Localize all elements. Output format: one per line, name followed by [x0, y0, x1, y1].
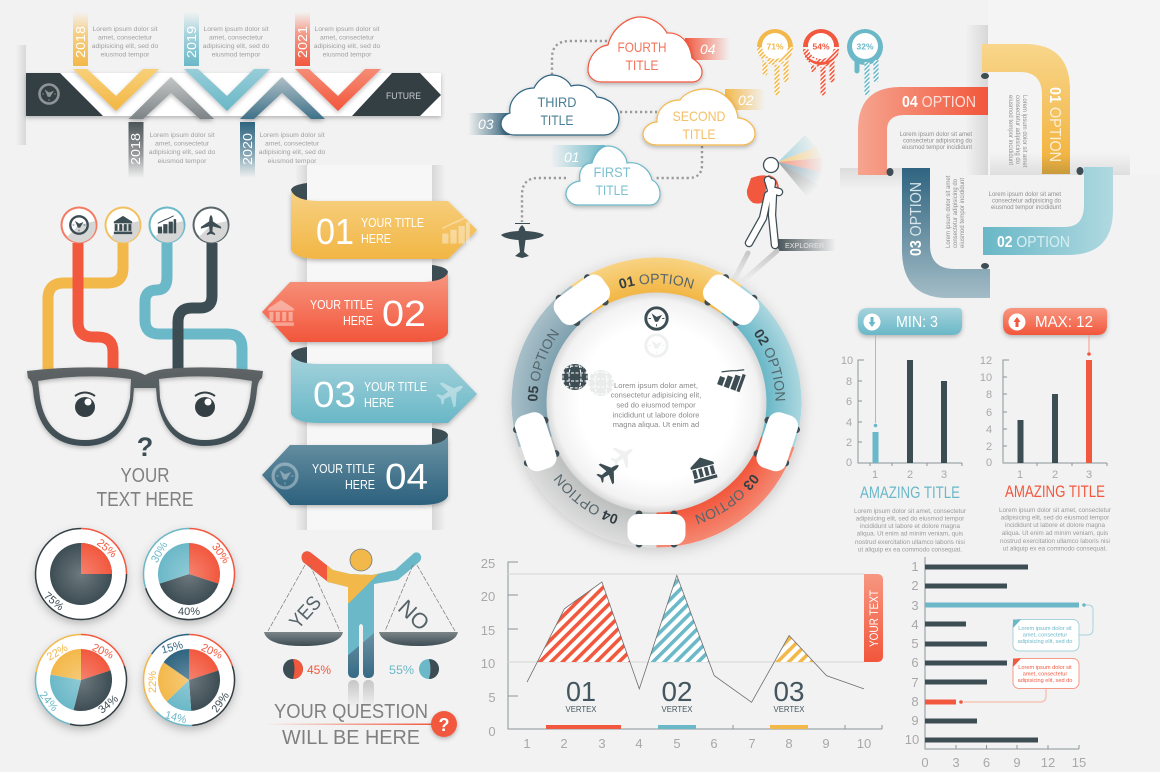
banner 01: [291, 183, 477, 259]
ring center text: magna aliqua. Ut enim ad: [613, 420, 699, 429]
year tabs: 2021: [296, 26, 310, 58]
timeline text blocks: Lorem ipsum dolor sit: [93, 26, 158, 33]
axis labels: 2: [986, 441, 992, 453]
paragraph: adipisicing elit, sed do eiusmod tempor: [1001, 514, 1109, 522]
year tabs: 2018: [74, 26, 88, 58]
icon: chart: [148, 206, 186, 244]
vertex labels: VERTEX: [774, 704, 805, 714]
axis: [858, 360, 962, 466]
cloud: second title: [643, 89, 755, 145]
callout blue: [1013, 603, 1093, 651]
pie 20 29 14 22 15: [143, 634, 235, 727]
axis numbers: 8: [911, 694, 919, 709]
icon: explorer figure: [735, 135, 836, 280]
ring segments: [513, 275, 800, 549]
option 03 band: [902, 168, 990, 298]
axis numbers: 2: [560, 736, 568, 751]
paragraph: [999, 507, 1111, 552]
axis numbers: 15: [481, 623, 495, 638]
vertex labels: VERTEX: [662, 704, 693, 714]
axis numbers: 10: [481, 656, 495, 671]
banner 02: YOUR TITLE: [310, 298, 373, 312]
vertex labels: [566, 676, 805, 714]
side tab your text: YOUR TEXT: [867, 589, 881, 647]
axis labels: 3: [1086, 469, 1092, 481]
axis numbers: 25: [481, 556, 495, 571]
option 04 band: [858, 87, 988, 176]
cloud number tabs: [468, 38, 765, 167]
axis labels: 10: [841, 355, 853, 367]
timeline text blocks: amet, consectetur: [155, 140, 210, 148]
pie 20 34 24 22: 24%: [37, 689, 60, 714]
timeline text blocks: amet, consectetur: [209, 34, 264, 42]
axis labels: 8: [986, 389, 992, 401]
heading: your text here: TEXT HERE: [96, 489, 194, 511]
cloud: first title: TITLE: [596, 182, 628, 198]
panel: glasses character: [27, 206, 263, 511]
panel: scales question: [264, 545, 458, 749]
banner 03: 03: [313, 374, 356, 415]
option 02 band: [983, 167, 1113, 255]
paragraph: Lorem ipsum dolor sit amet, consectetur: [999, 507, 1111, 514]
axis labels: 8: [846, 376, 852, 388]
max badge: MAX: 12: [1035, 314, 1093, 331]
axis numbers: 6: [911, 655, 919, 670]
icon: bank: [104, 206, 142, 244]
axis numbers: 3: [911, 598, 919, 613]
yes no percent: 55%: [389, 663, 414, 677]
axis: [925, 557, 1079, 749]
pie 30 40 30: [143, 528, 235, 620]
paragraph: Lorem ipsum dolor sit amet, consectetur: [854, 508, 966, 515]
banner 01: 01: [316, 211, 354, 252]
swirl text blocks: Lorem ipsum dolor sit amet: [900, 132, 972, 138]
cloud number tabs: 03: [478, 116, 494, 132]
callout red: adipisicing elit, sed do: [1018, 678, 1072, 684]
axis numbers: 12: [1041, 755, 1055, 770]
explorer tag: [778, 239, 836, 251]
timeline future arrow: [352, 73, 441, 116]
question heading: [274, 701, 428, 749]
axis labels: 4: [846, 417, 852, 429]
panel: cloud roadmap: [468, 17, 765, 258]
icon: airplane: [501, 223, 544, 258]
explorer tag: EXPLORER: [785, 243, 824, 250]
timeline text blocks: amet, consectetur: [265, 140, 320, 148]
timeline text blocks: eiusmod tempor: [323, 52, 372, 58]
cloud number tabs: 01: [564, 149, 580, 165]
ring center text: consectetur adipisicing elit,: [611, 390, 701, 400]
vertex labels: 03: [774, 676, 804, 707]
year tabs: 2018: [129, 133, 143, 165]
axis labels: 6: [986, 407, 992, 419]
inner disc: [546, 292, 766, 512]
timeline text blocks: adipisicing elit, sed do: [149, 149, 215, 156]
vertex labels: VERTEX: [566, 704, 597, 714]
axis labels: 4: [986, 424, 992, 436]
title: AMAZING TITLE: [1005, 482, 1105, 501]
panel: min bar chart: [841, 308, 966, 554]
axis numbers: 2: [911, 578, 919, 593]
timeline text blocks: eiusmod tempor: [268, 158, 317, 165]
heading: your text here: [96, 465, 194, 511]
axis labels: 6: [846, 396, 852, 408]
axis numbers: 1: [911, 559, 919, 574]
cloud: third title: THIRD: [538, 94, 576, 110]
timeline text blocks: adipisicing elit, sed do: [314, 43, 380, 50]
axis numbers: 5: [488, 690, 496, 705]
axis numbers: 8: [785, 736, 793, 751]
timeline text blocks: [92, 26, 380, 165]
axis labels: 2: [907, 469, 913, 481]
pie 30 40 30: 30%: [209, 541, 232, 566]
ring labels: 02 OPTION: [754, 330, 786, 401]
option 04 band: 04 OPTION: [902, 94, 976, 111]
scale pans: NO: [393, 595, 434, 636]
banner 02: HERE: [343, 314, 373, 328]
axis: [1003, 360, 1107, 466]
hatched vertices: [537, 575, 814, 662]
swirl text blocks: consectetur adipisicing do: [992, 198, 1062, 204]
axis labels: 1: [872, 469, 878, 481]
cloud: first title: [566, 146, 660, 205]
title: AMAZING TITLE: [860, 483, 960, 502]
badge 32%: 32%: [856, 42, 874, 52]
cloud: first title: FIRST: [594, 164, 631, 180]
paragraph: incididunt ut labore et dolore magna: [1005, 522, 1106, 529]
swirl text blocks: eiusmod tempor incididunt: [1007, 95, 1013, 165]
pie 25 75: [36, 528, 126, 620]
ring center text: sed do eiusmod tempor: [616, 400, 696, 410]
line: [527, 575, 864, 702]
pie 25 75: 25%: [94, 537, 119, 560]
timeline text blocks: adipisicing elit, sed do: [259, 149, 325, 156]
cloud number tabs: 02: [738, 92, 754, 108]
option 01 band: [981, 44, 1070, 174]
ring labels: 05 OPTION: [528, 328, 559, 401]
axis numbers: 7: [911, 675, 919, 690]
option 02 band: 02 OPTION: [997, 234, 1070, 251]
axis numbers: 4: [635, 736, 643, 751]
timeline text blocks: eiusmod tempor: [212, 52, 261, 58]
swirl text blocks: eiusmod tempor incididunt: [991, 205, 1061, 211]
panel: max bar chart: [980, 308, 1111, 552]
cloud: second title: TITLE: [682, 126, 716, 142]
axis labels: 10: [980, 372, 992, 384]
pie 30 40 30: 40%: [178, 606, 200, 618]
ring labels: 01 OPTION: [619, 274, 694, 289]
banner 01: HERE: [361, 232, 391, 246]
axis numbers: 20: [481, 589, 495, 604]
chevrons: [73, 69, 381, 119]
bars: [1018, 360, 1092, 463]
ring labels: [528, 274, 786, 524]
panel: horizontal bar chart: [905, 557, 1093, 770]
callout blue: amet, consectetur: [1023, 632, 1067, 638]
axis numbers: 10: [905, 732, 919, 747]
pie 20 34 24 22: 34%: [96, 693, 121, 716]
vertex labels: 02: [662, 676, 692, 707]
glasses: [27, 367, 263, 446]
axis labels: 0: [986, 457, 992, 469]
timeline text blocks: Lorem ipsum dolor sit: [204, 26, 269, 33]
figure: [302, 548, 422, 678]
timeline text blocks: amet, consectetur: [320, 34, 375, 42]
ring center text: [611, 381, 701, 429]
pie 30 40 30: 30%: [149, 540, 171, 565]
option 03 band: 03 OPTION: [908, 182, 925, 256]
timeline text blocks: adipisicing elit, sed do: [92, 43, 158, 50]
badge 71%: 71%: [766, 42, 784, 52]
axis numbers: [905, 559, 1086, 770]
foot shadows: [735, 251, 777, 280]
axis numbers: 4: [911, 617, 919, 632]
min badge: [858, 308, 962, 335]
red question badge: ?: [438, 715, 450, 735]
panel: option ring: [506, 254, 808, 556]
pie 20 29 14 22 15: 14%: [164, 709, 188, 727]
callout red: Lorem ipsum dolor sit: [1018, 665, 1072, 671]
axis numbers: 10: [857, 736, 871, 751]
question heading: WILL BE HERE: [282, 727, 420, 749]
bars: [872, 360, 947, 463]
pie 20 34 24 22: [36, 634, 127, 725]
panel: timeline: [16, 12, 441, 178]
axis numbers: 15: [1072, 755, 1086, 770]
bars: [925, 564, 1079, 742]
swirl text blocks: Lorem ipsum dolor sit amet: [989, 192, 1061, 198]
colored pipes: [48, 243, 242, 372]
panel: pie charts: [36, 528, 235, 727]
swirl text blocks: consectetur adipisicing do: [1014, 95, 1020, 165]
ring center text: incididunt ut labore dolore: [613, 410, 699, 420]
axis numbers: 9: [1013, 755, 1021, 770]
swirl text blocks: consectetur adipisicing do: [903, 138, 973, 144]
ring labels: 04 OPTION: [554, 474, 618, 524]
axis numbers: 9: [822, 736, 830, 751]
icon: plane: [192, 206, 230, 244]
dotted connectors: [522, 41, 702, 222]
timeline text blocks: eiusmod tempor: [101, 52, 150, 58]
max badge: [1003, 308, 1107, 335]
swirl text blocks: Lorem ipsum dolor sit amet: [946, 175, 952, 248]
banner 03: YOUR TITLE: [364, 380, 427, 394]
banner 03: HERE: [364, 396, 394, 410]
paragraph: aliqua. Ut enim ad minim veniam, quis: [1002, 530, 1108, 537]
ring icons: [562, 308, 747, 489]
axis labels: 3: [941, 469, 947, 481]
leg reflection: [348, 680, 374, 708]
swirl text blocks: Lorem ipsum dolor sit amet: [1021, 95, 1027, 168]
axis labels: 12: [980, 355, 992, 367]
axis labels: [980, 355, 1092, 481]
timeline left arrow with clock: [26, 73, 103, 116]
heading: your text here: YOUR: [120, 465, 170, 487]
swirl text blocks: consectetur adipisicing do: [953, 178, 959, 248]
axis segments: [546, 725, 808, 729]
paragraph: adipisicing elit, sed do eiusmod tempor: [856, 516, 964, 522]
banner 03: [291, 347, 477, 423]
callout blue: Lorem ipsum dolor sit: [1018, 626, 1072, 632]
axis labels: 2: [1052, 469, 1058, 481]
timeline text blocks: adipisicing elit, sed do: [203, 43, 269, 50]
paragraph: [854, 508, 966, 554]
callout blue: adipisicing elit, sed do: [1018, 639, 1072, 645]
axis numbers: [481, 556, 871, 751]
scale pans: YES: [286, 592, 326, 633]
panel: arrow banners: [262, 165, 477, 530]
year tabs: [73, 12, 310, 178]
question heading: YOUR QUESTION: [274, 701, 428, 723]
pie 20 29 14 22 15: 29%: [209, 690, 232, 715]
axis numbers: 9: [911, 713, 919, 728]
ring labels: 03 OPTION: [695, 474, 758, 524]
min badge: MIN: 3: [896, 314, 938, 331]
axis numbers: 5: [673, 736, 681, 751]
option 01 band: 01 OPTION: [1046, 87, 1063, 162]
paragraph: ut aliquip ex ea commodo consequat.: [1003, 546, 1107, 552]
banner 02: [262, 265, 448, 342]
paragraph: ut aliquip ex ea commodo consequat.: [858, 546, 962, 554]
timeline text blocks: amet, consectetur: [98, 34, 153, 42]
year tabs: 2020: [241, 133, 255, 165]
axis numbers: 6: [983, 755, 990, 770]
yes no percent: [283, 659, 439, 679]
axis numbers: 3: [952, 755, 960, 770]
yes no percent: 45%: [307, 663, 331, 677]
panel: drip percentage badges: [757, 29, 883, 96]
paragraph: nostrud exercitation ullamco laboris nisi: [855, 539, 965, 546]
cloud: third title: [501, 75, 619, 135]
red question badge: [265, 711, 457, 737]
cloud: fourth title: [588, 17, 702, 82]
swirl text blocks: eiusmod tempor incididunt: [902, 145, 972, 151]
pie 20 34 24 22: 20%: [90, 642, 115, 662]
swirl text blocks: eiusmod tempor incididunt: [960, 178, 966, 248]
panel: swirl options: [840, 0, 1160, 298]
pie 20 34 24 22: 22%: [45, 642, 70, 663]
cloud: fourth title: TITLE: [626, 57, 658, 73]
cloud number tabs: 04: [700, 41, 716, 57]
cloud: fourth title: FOURTH: [618, 39, 666, 55]
axis numbers: 7: [748, 736, 756, 751]
question mark: ?: [137, 432, 153, 462]
timeline future arrow: FUTURE: [386, 91, 421, 102]
side tab your text: [864, 574, 883, 662]
axis labels: 2: [846, 437, 852, 449]
scale pans: [264, 565, 458, 646]
vertex labels: 01: [566, 676, 596, 707]
ring center text: Lorem ipsum dolor amet,: [614, 381, 698, 390]
pie 20 29 14 22 15: 20%: [199, 642, 224, 662]
axis numbers: 0: [488, 724, 496, 739]
axis labels: 1: [1017, 469, 1023, 481]
swirl text blocks: [900, 95, 1062, 248]
axes and reference lines: [508, 562, 882, 729]
white connectors: [510, 268, 803, 548]
icon circles: [60, 206, 230, 244]
timeline text blocks: Lorem ipsum dolor sit: [260, 132, 325, 139]
axis numbers: 6: [710, 736, 718, 751]
callout red: [959, 658, 1079, 704]
timeline text blocks: Lorem ipsum dolor sit: [150, 132, 215, 139]
year tabs: 2019: [185, 26, 199, 58]
cloud: second title: SECOND: [672, 108, 726, 124]
timeline text blocks: Lorem ipsum dolor sit: [315, 26, 380, 33]
badge 54%: 54%: [812, 42, 830, 52]
banner 04: HERE: [345, 478, 375, 492]
axis labels: [841, 355, 947, 481]
paragraph: aliqua. Ut enim ad minim veniam, quis: [857, 530, 963, 538]
banner 04: 04: [385, 456, 428, 497]
pie 25 75: 75%: [41, 590, 66, 613]
icon: clock: [60, 206, 98, 244]
axis numbers: 5: [911, 636, 919, 651]
axis numbers: 0: [921, 755, 929, 770]
timeline text blocks: eiusmod tempor: [158, 158, 207, 165]
min leader: [874, 335, 877, 427]
pie 20 29 14 22 15: 15%: [160, 639, 185, 656]
pie 20 29 14 22 15: 22%: [147, 671, 159, 693]
cloud: third title: TITLE: [540, 112, 574, 128]
axis numbers: 1: [523, 736, 531, 751]
banner 01: YOUR TITLE: [361, 216, 424, 230]
axis numbers: 3: [598, 736, 606, 751]
paragraph: incididunt ut labore et dolore magna: [860, 523, 961, 530]
callout red: amet, consectetur: [1023, 672, 1067, 678]
paragraph: nostrud exercitation ullamco laboris nisi: [1000, 538, 1110, 545]
banner 04: YOUR TITLE: [312, 462, 375, 476]
eyes: [75, 392, 215, 417]
banner 04: [262, 428, 448, 505]
max leader: [1087, 335, 1091, 356]
panel: line chart: [481, 556, 883, 751]
banner 02: 02: [382, 293, 426, 334]
axis labels: 0: [846, 457, 852, 469]
light rays: [778, 135, 822, 198]
